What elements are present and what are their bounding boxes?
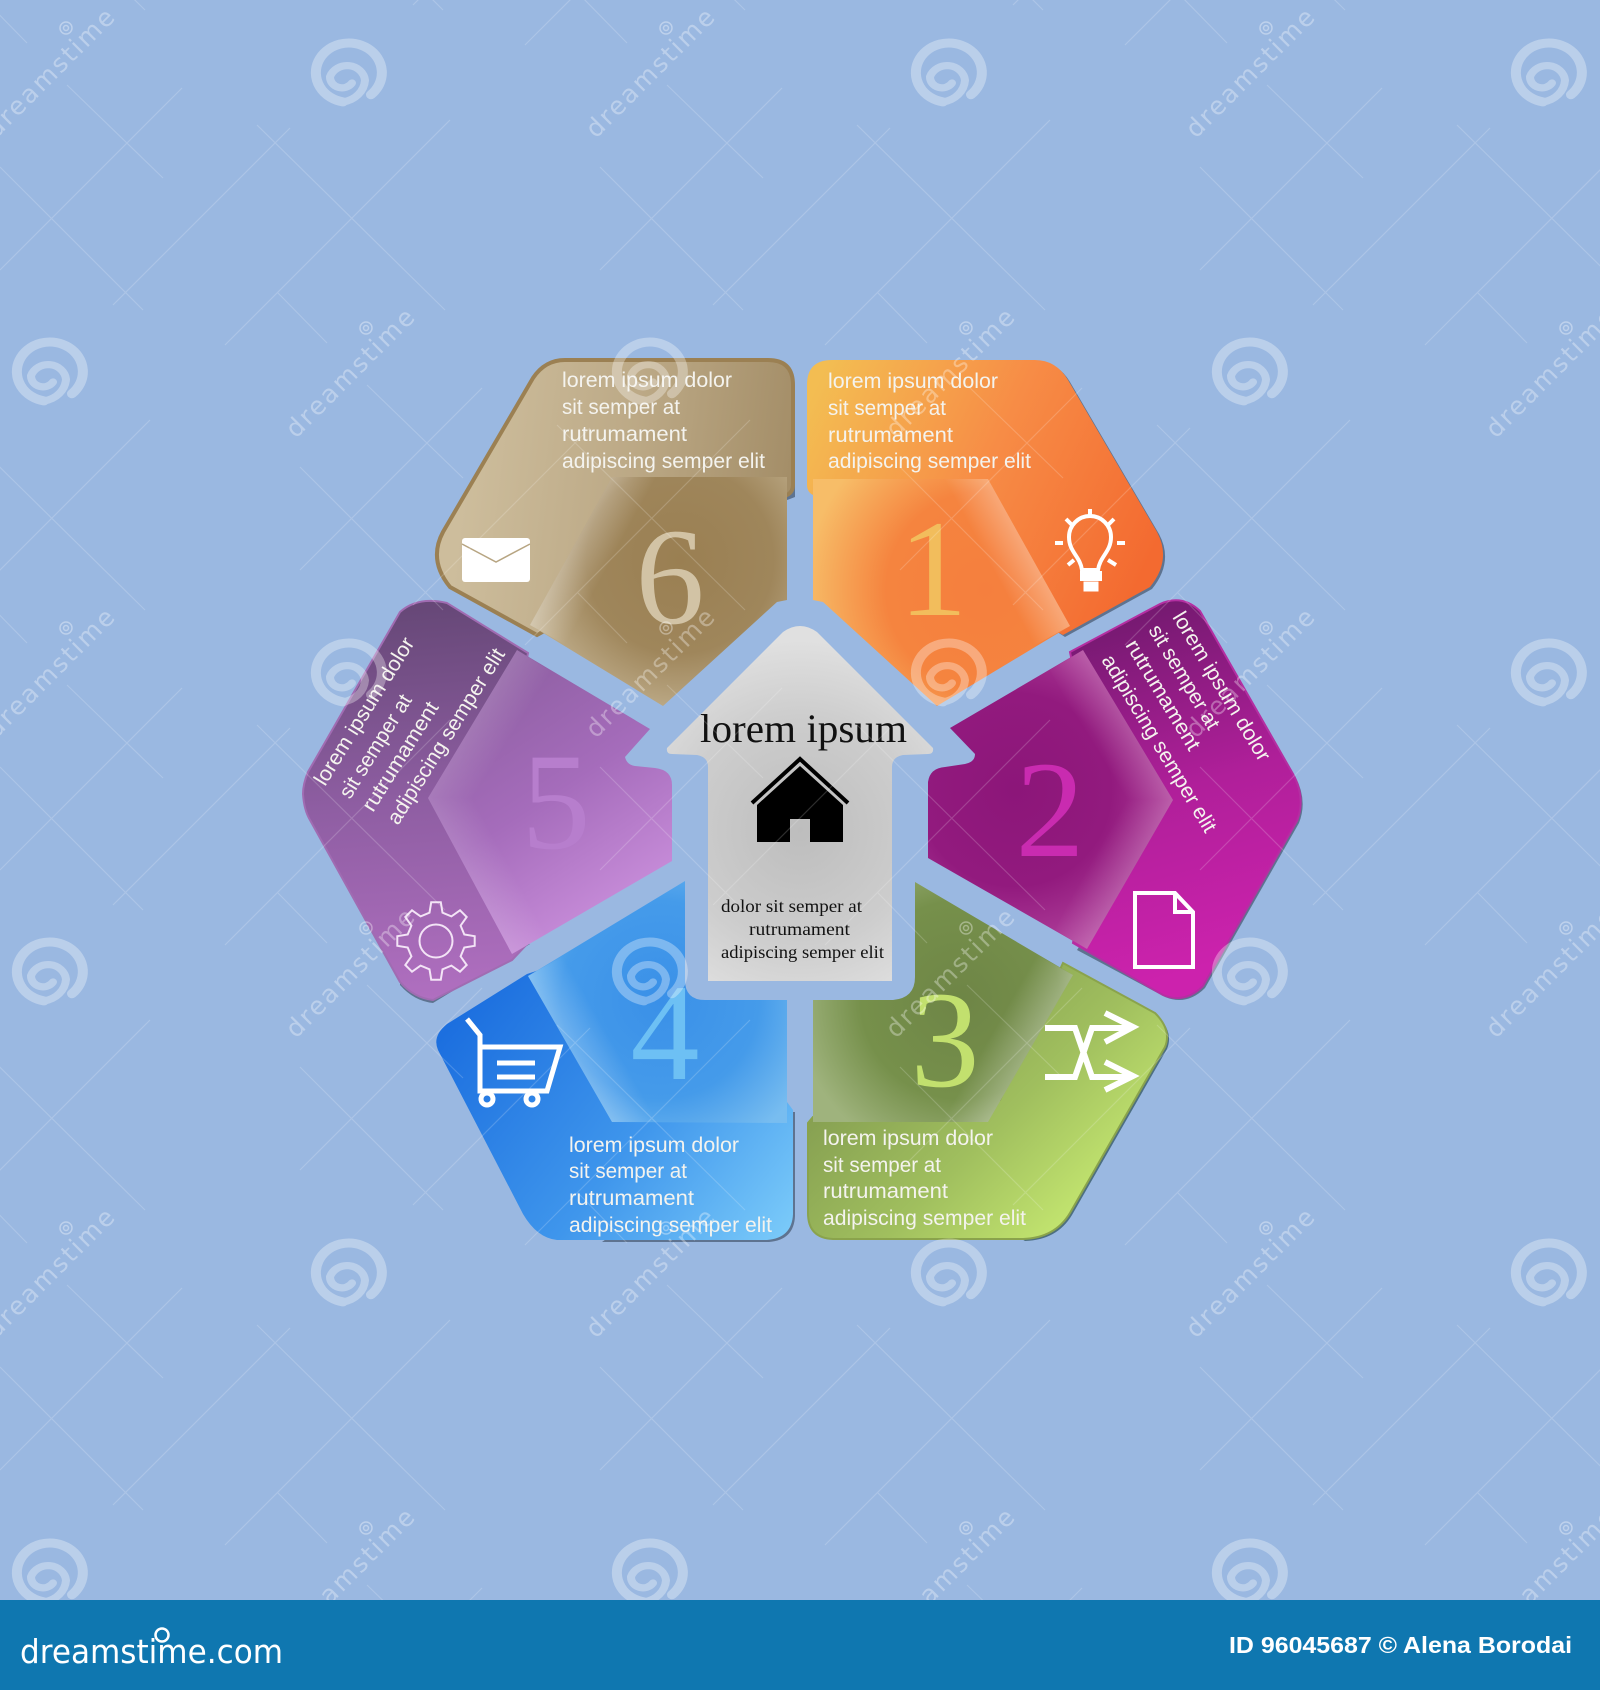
arrow shape: [667, 626, 933, 981]
panel 1 text: adipiscing semper elit: [828, 450, 1031, 473]
panel 5 number: 5: [522, 725, 590, 878]
panel 5 text: rutrumament: [358, 697, 444, 816]
center description: rutrumament: [749, 919, 850, 939]
panel 4 text: adipiscing semper elit: [569, 1214, 772, 1237]
panel 2 shadow: [1077, 613, 1303, 1000]
panel 2 inner fold: [928, 650, 1173, 949]
panel 2 text: rutrumament: [1121, 636, 1205, 755]
panel 4 text: lorem ipsum dolor: [569, 1134, 739, 1157]
panel 3 number: 3: [910, 963, 980, 1116]
center heading: lorem ipsum: [700, 706, 907, 751]
panel 4 fold sheen: [528, 945, 667, 1122]
panel 1 inner fold: [813, 479, 1070, 706]
panel 1 number: 1: [898, 492, 968, 645]
panel 1 text: [828, 370, 1031, 473]
panel 6: tan: [437, 360, 795, 706]
watermark wordmarks: dreamstime: [280, 903, 420, 1043]
watermark wordmarks: dreamstime: [1180, 3, 1320, 143]
panel 1 text: lorem ipsum dolor: [828, 370, 998, 393]
panel 3 text: sit semper at: [823, 1154, 941, 1177]
icon: house: [752, 759, 848, 842]
panel 3 fold sheen: [935, 945, 1073, 1122]
panel 3 text: [823, 1127, 1026, 1230]
icon: shopping cart: [467, 1019, 560, 1105]
panel 3 text: lorem ipsum dolor: [823, 1127, 993, 1150]
footer bar: [0, 1600, 1600, 1690]
panel 3 inner fold: [813, 882, 1073, 1122]
panel 1 shadow: [1037, 362, 1165, 637]
panel 5: purple: [303, 601, 672, 1003]
panel 5 text: [310, 633, 510, 829]
watermark wordmarks: dreamstime: [580, 1203, 720, 1343]
icon: envelope: [462, 538, 530, 582]
watermark wordmarks: dreamstime: [880, 903, 1020, 1043]
icon: light bulb: [1055, 509, 1125, 591]
panel 2 text: lorem ipsum dolor: [1168, 608, 1275, 765]
center description: adipiscing semper elit: [721, 942, 884, 962]
panel 3 body: [808, 963, 1167, 1239]
panel 6 shadow: [772, 367, 795, 502]
panel 4 text: rutrumament: [569, 1187, 694, 1210]
center description: [721, 896, 884, 962]
panel 2 text: adipiscing semper elit: [1097, 651, 1221, 837]
footer image id and credit: ID 96045687 © Alena Borodai: [1229, 1632, 1572, 1658]
panel 6 inner fold: [530, 477, 787, 706]
panel 2: magenta: [928, 600, 1303, 1000]
footer logo: dreamstime.com: [20, 1632, 283, 1671]
panel 2 body: [1070, 600, 1301, 998]
watermark wordmarks: dreamstime: [580, 603, 720, 743]
panel 6 body: [437, 360, 793, 635]
panel 3 text: rutrumament: [823, 1180, 948, 1203]
watermark wordmarks: dreamstime: [580, 3, 720, 143]
panel 5 text: sit semper at: [335, 690, 417, 803]
panel 4 shadow: [602, 1112, 795, 1242]
watermark wordmarks: dreamstime: [880, 1503, 1020, 1643]
watermark wordmarks: dreamstime: [1180, 603, 1320, 743]
panel 6 text: adipiscing semper elit: [562, 450, 765, 473]
icon: document: [1135, 893, 1193, 967]
panel 4 text: sit semper at: [569, 1160, 687, 1183]
panel 6 text: [562, 369, 765, 473]
panel 4 number: 4: [630, 956, 700, 1109]
panel 5 shadow: [400, 933, 530, 1003]
panel 4 text: [569, 1134, 772, 1237]
panel 1 text: rutrumament: [828, 424, 953, 447]
panel 4 body: [436, 950, 793, 1240]
panel 2 fold sheen: [1050, 650, 1173, 949]
panel 6 text: lorem ipsum dolor: [562, 369, 732, 392]
panel 2 text: [1097, 608, 1275, 837]
panel 5 body: [303, 601, 530, 1000]
panel 6 fold sheen: [530, 477, 670, 656]
center arrow: [667, 626, 933, 981]
watermark wordmarks: dreamstime: [280, 303, 420, 443]
panel 3 text: adipiscing semper elit: [823, 1207, 1026, 1230]
panel 1: orange: [807, 360, 1165, 706]
panel 6 text: rutrumament: [562, 423, 687, 446]
panel 1 fold sheen: [930, 479, 1070, 656]
watermark wordmarks: dreamstime: [880, 303, 1020, 443]
panel 2 number: 2: [1016, 733, 1084, 886]
panel 4 inner fold: [528, 881, 787, 1123]
panel 3 shadow: [1002, 965, 1169, 1241]
panel 5 text: adipiscing semper elit: [383, 644, 510, 829]
watermark wordmarks: dreamstime: [1180, 1203, 1320, 1343]
icon: shuffle arrows: [1045, 1013, 1133, 1090]
panel 3: green: [808, 882, 1169, 1241]
icon: gear: [397, 902, 475, 980]
panel 6 number: 6: [636, 500, 704, 653]
panel 1 text: sit semper at: [828, 397, 946, 420]
panel 6 text: sit semper at: [562, 396, 680, 419]
panel 5 fold sheen: [428, 650, 552, 954]
panel 1 body: [807, 360, 1163, 635]
center description: dolor sit semper at: [721, 896, 862, 916]
watermark wordmarks: dreamstime: [280, 1503, 420, 1643]
panel 5 text: lorem ipsum dolor: [310, 633, 419, 790]
panel 5 inner fold: [428, 650, 672, 954]
panel 2 text: sit semper at: [1144, 621, 1224, 734]
panel 4: blue: [436, 881, 795, 1242]
